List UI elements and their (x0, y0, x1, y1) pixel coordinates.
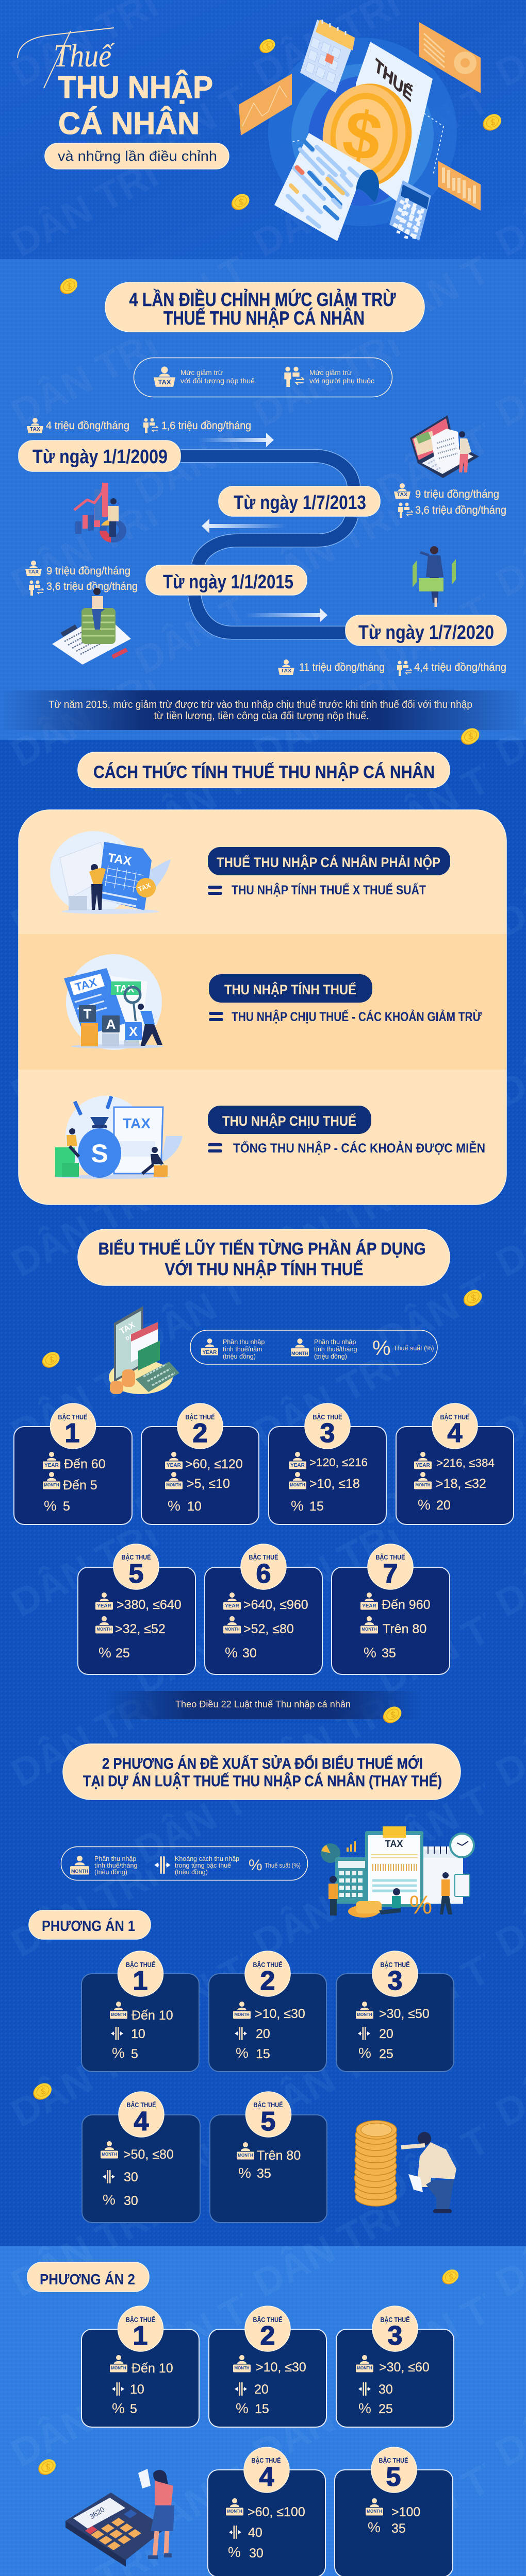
legend: deduction icons: TAX (158, 378, 171, 386)
milestone: 1/1/2009: TAX (30, 426, 40, 432)
heading: two proposals: 2 PHƯƠNG ÁN ĐỀ XUẤT SỬA ĐỔI BIỂU THUẾ MỚI (102, 1755, 423, 1772)
note band (0, 690, 526, 730)
subtitle pill: và những lần điều chỉnh (58, 148, 217, 164)
illustration: woman with calendar and tax form (50, 831, 171, 914)
plan 2 bracket 3: >30, ≤60 (379, 2360, 430, 2375)
tax bracket 3: YEAR (290, 1463, 305, 1468)
arrow: to the left (202, 519, 287, 533)
plan 2 label (27, 2262, 149, 2292)
legend: tax table: Phần thu nhập (314, 1338, 356, 1346)
illustration: money bag and tax form: S (91, 1139, 108, 1168)
plan 1 bracket 3: >30, ≤50 (379, 2007, 430, 2021)
formula 3: TỔNG THU NHẬP - CÁC KHOẢN ĐƯỢC MIỄN (233, 1140, 485, 1156)
plan 2 bracket 4: MONTH (227, 2509, 242, 2514)
plan 2 bracket 1: 5 (130, 2402, 137, 2416)
plan 2 bracket 5: 5 (386, 2462, 401, 2492)
plan 1 bracket 4: MONTH (102, 2152, 117, 2157)
plan 1 bracket 2: % (236, 2045, 249, 2061)
legend: tax table: (triệu đồng) (314, 1353, 347, 1360)
source band: law article: Theo Điều 22 Luật thuế Thu nhập cá nhân (175, 1699, 351, 1709)
plan 1 bracket 1: Đến 10 (132, 2008, 173, 2023)
tax bracket 6: BẬC THUẾ (249, 1553, 278, 1561)
plan 2 bracket 2: 20 (254, 2382, 269, 2397)
legend: proposals: tính thuế/tháng (94, 1862, 137, 1869)
legend: tax table: YEAR (203, 1350, 217, 1355)
legend: proposals: MONTH (71, 1869, 88, 1874)
heading: progressive tax table: BIỂU THUẾ LŨY TIẾN TỪNG PHẦN ÁP DỤNG (98, 1239, 426, 1258)
milestone: 1/1/2015 (25, 561, 307, 596)
plan 1 bracket 1 (81, 1951, 199, 2072)
plan 1 bracket 2: MONTH (234, 2012, 250, 2017)
plan 2 bracket 2: BẬC THUẾ (253, 2316, 283, 2324)
illustration: person on money stack (52, 588, 131, 665)
background: calculation and tax tables (0, 740, 526, 2246)
legend: deduction icons: với người phụ thuộc (309, 377, 374, 385)
milestone: 1/1/2009: Từ ngày 1/1/2009 (32, 446, 168, 468)
tax bracket 7: % (364, 1645, 376, 1660)
legend: proposals: Thuế suất (%) (265, 1862, 301, 1869)
tax bracket 5: >380, ≤640 (117, 1598, 182, 1612)
tax bracket 2: 2 (193, 1418, 207, 1448)
heading: 4 adjustments (105, 282, 424, 332)
tax bracket 5: 5 (129, 1559, 143, 1589)
heading: 4 adjustments: 4 LẦN ĐIỀU CHỈNH MỨC GIẢM TRỪ (129, 289, 396, 310)
milestone: 1/7/2020: 4,4 triệu đồng/tháng (414, 662, 506, 673)
tax document (356, 42, 433, 206)
tax bracket 6: % (225, 1645, 238, 1660)
plan 1 bracket 5: 5 (261, 2107, 275, 2137)
plan 1 bracket 2: >10, ≤30 (255, 2007, 305, 2021)
legend: deduction icons: Mức giảm trừ (180, 368, 223, 377)
plan 1 label (29, 1910, 151, 1939)
plan 2 bracket 3 (336, 2306, 454, 2427)
tax bracket 7: Đến 960 (382, 1598, 431, 1612)
plan 1 bracket 5: % (238, 2165, 251, 2181)
milestone: 1/7/2013: TAX (397, 492, 407, 498)
plan 1 bracket 3 (336, 1951, 454, 2072)
tax bracket 4: 4 (448, 1418, 463, 1448)
milestone: 1/7/2013: 9 triệu đồng/tháng (415, 488, 499, 500)
heading: progressive tax table: VỚI THU NHẬP TÍNH THUẾ (165, 1260, 363, 1279)
heading: progressive tax table (78, 1229, 450, 1285)
tax bracket 7: MONTH (361, 1627, 377, 1632)
plan 2 bracket 4: 4 (259, 2462, 274, 2492)
subtitle pill (45, 143, 229, 169)
legend: deduction icons: với đối tượng nộp thuế (180, 377, 255, 385)
plan 1 label: PHƯƠNG ÁN 1 (42, 1917, 135, 1935)
main title line 1: THU NHẬP (58, 70, 213, 105)
plan 2 bracket 4 (208, 2447, 325, 2576)
plan 2 bracket 5 (335, 2447, 453, 2576)
tax bracket 6: >640, ≤960 (243, 1598, 308, 1612)
plan 1 bracket 1: 5 (131, 2047, 138, 2061)
plan 2 bracket 1 (81, 2306, 199, 2427)
tax bracket 1: Đến 60 (64, 1457, 106, 1471)
illustration: woman with calendar and tax form: TAX (107, 851, 133, 869)
illustration: woman at giant calculator (65, 2469, 174, 2567)
plan 2 bracket 4: 30 (249, 2546, 264, 2561)
plan 1 bracket 5: Trên 80 (257, 2148, 301, 2163)
tax bracket 3: 3 (320, 1418, 335, 1448)
tax bracket 1: YEAR (44, 1463, 59, 1468)
plan 1 bracket 4: >50, ≤80 (123, 2147, 174, 2162)
tax bracket 7 (332, 1544, 450, 1674)
plan 1 bracket 1: 1 (133, 1966, 147, 1996)
plan 2 bracket 3: % (358, 2400, 371, 2416)
legend: deduction icons: Mức giảm trừ (309, 368, 352, 377)
tax bracket 6 (205, 1544, 322, 1674)
legend: proposals: Khoảng cách thu nhập (175, 1855, 239, 1862)
formula 2 (209, 974, 482, 1024)
illustration: tax letters and magnifier: A (106, 1016, 116, 1032)
plan 1 bracket 4: % (103, 2192, 116, 2208)
legend: proposals (61, 1846, 307, 1880)
heading: two proposals (63, 1744, 461, 1800)
illustration: coin stack and man (354, 2121, 456, 2213)
plan 2 bracket 5: >100 (391, 2505, 420, 2519)
tax bracket 4: YEAR (416, 1463, 431, 1468)
tax bracket 2: YEAR (167, 1463, 182, 1468)
illustration: bar chart and analyst (74, 483, 126, 543)
tax bracket 2: MONTH (166, 1483, 182, 1487)
illustration: tax letters and magnifier (64, 954, 164, 1050)
tax bracket 3: >10, ≤18 (309, 1477, 360, 1491)
illustration: money bag and tax form: TAX (123, 1115, 151, 1131)
tax bracket 6: MONTH (224, 1627, 240, 1632)
tax bracket 1: MONTH (44, 1483, 59, 1487)
tax bracket 4 (396, 1403, 514, 1524)
source band: law article (103, 1691, 423, 1719)
hero: title block (18, 28, 229, 169)
legend: proposals: (triệu đồng) (94, 1869, 127, 1876)
plan 1 bracket 4 (82, 2092, 200, 2223)
legend: proposals: Phần thu nhập (94, 1855, 136, 1862)
plan 1 bracket 2 (209, 1951, 326, 2072)
tax bracket 5 (78, 1544, 195, 1674)
legend: tax table: MONTH (291, 1351, 308, 1356)
tax bracket 2: % (168, 1498, 180, 1514)
plan 1 bracket 3: 20 (379, 2027, 393, 2041)
legend: tax table: % (372, 1337, 391, 1360)
illustration: tax day phone: DAY (125, 1332, 137, 1342)
tax bracket 3: BẬC THUẾ (313, 1413, 342, 1421)
plan 1 bracket 5: BẬC THUẾ (254, 2101, 283, 2109)
tax bracket 4: MONTH (415, 1483, 431, 1487)
background: hero (0, 0, 526, 259)
plan 1 bracket 2: 20 (256, 2027, 270, 2041)
formula 1 (208, 847, 450, 897)
plan 1 bracket 3: % (358, 2045, 371, 2061)
tax bracket 6: 30 (242, 1646, 257, 1660)
plan 2 bracket 2: MONTH (234, 2366, 250, 2370)
tax bracket 4: >216, ≤384 (436, 1456, 495, 1469)
plan 1 bracket 2: 15 (256, 2047, 270, 2061)
tax bracket 5: MONTH (96, 1627, 112, 1632)
tax bracket 4: BẬC THUẾ (440, 1413, 469, 1421)
tax bracket 1: 1 (65, 1418, 79, 1448)
milestone: 1/1/2015: 9 triệu đồng/tháng (46, 565, 130, 577)
plan 1 bracket 3: MONTH (357, 2012, 372, 2017)
orange chart cards (239, 22, 481, 211)
plan 2 bracket 2: >10, ≤30 (256, 2360, 306, 2375)
milestone: 1/7/2013: 3,6 triệu đồng/tháng (415, 504, 506, 516)
plan 1 bracket 3: 3 (388, 1966, 402, 1996)
calendar (300, 20, 355, 93)
milestone: 1/1/2015: TAX (28, 569, 39, 575)
tax bracket 1: 5 (63, 1499, 70, 1514)
heading: two proposals: TẠI DỰ ÁN LUẬT THUẾ THU NHẬP CÁ NHÂN (THAY THẾ) (83, 1772, 442, 1790)
legend: deduction icons (134, 358, 392, 397)
arrow: to the right (245, 608, 327, 622)
note band: Từ năm 2015, mức giảm trừ được trừ vào thu nhập chịu thuế trước khi tính thuế đối với thu nhập (48, 699, 472, 710)
hero coins (228, 37, 504, 213)
plan 2 bracket 5: MONTH (367, 2509, 382, 2514)
main title line 2: CÁ NHÂN (58, 106, 200, 141)
legend: tax table: Thuế suất (%) (393, 1345, 434, 1352)
background: plan 2 (0, 2246, 526, 2576)
tax bracket 7: Trên 80 (383, 1622, 426, 1636)
script word: Thuế (54, 39, 115, 74)
plan 1 bracket 2: BẬC THUẾ (253, 1961, 283, 1969)
formula 2: THU NHẬP CHỊU THUẾ - CÁC KHOẢN GIẢM TRỪ (232, 1009, 482, 1024)
plan 1 bracket 1: MONTH (111, 2012, 126, 2017)
calculator (389, 180, 431, 241)
plan 2 bracket 5: BẬC THUẾ (379, 2456, 408, 2464)
illustration: laptop with receipt (410, 415, 479, 478)
plan 2 bracket 2: 15 (255, 2402, 269, 2416)
plan 2 bracket 1: 10 (130, 2382, 144, 2397)
milestone: 1/7/2013: Từ ngày 1/7/2013 (234, 492, 366, 514)
plan 1 bracket 5: MONTH (238, 2153, 253, 2158)
illustration: clipboard, calculator and calendar (321, 1826, 474, 1919)
illustration: tax letters and magnifier: TAX (114, 984, 135, 995)
tax bracket 2: BẬC THUẾ (186, 1413, 215, 1421)
tax bracket 5: >32, ≤52 (115, 1622, 166, 1636)
plan 1 bracket 5 (210, 2092, 327, 2223)
legend: tax table: Phần thu nhập (223, 1338, 265, 1346)
legend: tax table (190, 1330, 437, 1364)
illustration: clipboard, calculator and calendar: % (409, 1890, 432, 1919)
plan 1 bracket 3: 25 (379, 2047, 393, 2061)
tax bracket 2: >60, ≤120 (185, 1457, 243, 1471)
milestone: 1/7/2020: Từ ngày 1/7/2020 (358, 622, 494, 643)
illustration: clipboard, calculator and calendar: TAX (385, 1839, 403, 1849)
tax bracket 5: YEAR (97, 1603, 112, 1609)
arrow: to the right (198, 433, 274, 447)
heading: 4 adjustments: THUẾ THU NHẬP CÁ NHÂN (163, 307, 365, 329)
tax bracket 6: 6 (256, 1559, 271, 1589)
decorative coins (40, 1286, 485, 1370)
tax bracket 7: 7 (383, 1559, 398, 1589)
plan 2 bracket 3: 3 (388, 2321, 402, 2351)
heading: how to calculate: CÁCH THỨC TÍNH THUẾ THU NHẬP CÁ NHÂN (93, 762, 435, 782)
legend: tax table: tính thuế/năm (223, 1346, 262, 1353)
milestone: 1/7/2013 (219, 483, 506, 518)
plan 2 bracket 1: MONTH (111, 2366, 126, 2370)
tax document: THUẾ (373, 55, 414, 106)
panel: calculation formulas (19, 810, 506, 1205)
tax bracket 6: >52, ≤80 (243, 1622, 294, 1636)
plan 2 bracket 1: 1 (133, 2321, 147, 2351)
milestone: 1/7/2020: 11 triệu đồng/tháng (299, 662, 385, 673)
illustration: tax letters and magnifier: X (129, 1024, 138, 1039)
illustration: woman with money (413, 546, 456, 607)
plan 1 bracket 5: 35 (257, 2166, 271, 2181)
tax bracket 4: >18, ≤32 (436, 1477, 486, 1491)
background: deduction section (0, 259, 526, 740)
tax bracket 4: 20 (436, 1498, 451, 1513)
hero illustration: coin, tax documents, calendar, calculator (239, 20, 481, 241)
milestone: 1/1/2015: Từ ngày 1/1/2015 (163, 571, 293, 593)
note band: từ tiền lương, tiền công của đối tượng nộp thuế. (154, 710, 369, 722)
big coin: $ (338, 95, 387, 176)
illustration: tax letters and magnifier: TAX (74, 976, 98, 994)
plan 1 bracket 4: 30 (124, 2194, 138, 2208)
milestone: 1/7/2020 (278, 615, 506, 676)
plan 2 bracket 5: 35 (391, 2521, 406, 2536)
formula 2: THU NHẬP TÍNH THUẾ (224, 981, 356, 997)
heading: how to calculate (78, 752, 450, 788)
decorative coin (458, 725, 482, 748)
plan 1 bracket 4: 30 (124, 2170, 138, 2184)
plan 2 bracket 4: 40 (248, 2526, 262, 2540)
tax bracket 3: >120, ≤216 (309, 1456, 368, 1469)
illustration: money bag and tax form (55, 1096, 183, 1179)
illustration: woman at giant calculator: 3620 (88, 2505, 106, 2520)
tax bracket 4: % (418, 1497, 431, 1513)
milestone: 1/7/2020: TAX (281, 668, 291, 674)
legend: tax table: (triệu đồng) (223, 1353, 256, 1360)
plan 2 bracket 2 (209, 2306, 326, 2427)
plan 2 bracket 3: BẬC THUẾ (381, 2316, 409, 2324)
illustration: tax day phone (109, 1306, 179, 1394)
tax bracket 3: MONTH (290, 1483, 305, 1487)
decorative coin (36, 2456, 58, 2478)
legend: proposals: (triệu đồng) (175, 1869, 208, 1876)
plan 2 label: PHƯƠNG ÁN 2 (40, 2270, 135, 2288)
tax bracket 7: BẬC THUẾ (375, 1553, 405, 1561)
decorative coin (439, 2267, 461, 2287)
tax bracket 1: % (44, 1498, 57, 1514)
timeline connector (180, 456, 354, 633)
tax bracket 5: 25 (116, 1646, 130, 1660)
decorative coin (380, 1703, 404, 1726)
tax bracket 3 (269, 1403, 386, 1524)
tax bracket 7: YEAR (362, 1603, 377, 1609)
illustration: woman with calendar and tax form: TAX (137, 881, 152, 893)
tax bracket 5: % (98, 1645, 111, 1660)
plan 2 bracket 5: % (368, 2519, 381, 2535)
tax bracket 2 (141, 1403, 259, 1524)
plan 2 bracket 4: % (228, 2544, 241, 2560)
receipt (274, 133, 379, 241)
tax bracket 6: YEAR (225, 1603, 240, 1609)
formula 1: THU NHẬP TÍNH THUẾ X THUẾ SUẤT (232, 882, 426, 897)
legend: proposals: trong từng bậc thuế (175, 1862, 231, 1869)
tax bracket 1: Đến 5 (63, 1478, 97, 1493)
milestone: 1/1/2009: 4 triệu đồng/tháng (46, 420, 129, 432)
plan 1 bracket 1: 10 (131, 2027, 145, 2041)
tax bracket 2: >5, ≤10 (187, 1477, 230, 1491)
tax bracket 1: BẬC THUẾ (58, 1413, 88, 1421)
plan 2 bracket 1: Đến 10 (132, 2361, 173, 2376)
decorative coin (57, 276, 80, 297)
illustration: tax letters and magnifier: T (84, 1006, 92, 1022)
legend: tax table: tính thuế/tháng (314, 1346, 357, 1353)
plan 2 bracket 4: BẬC THUẾ (252, 2456, 281, 2464)
tax bracket 7: 35 (382, 1646, 396, 1660)
formula 1: THUẾ THU NHẬP CÁ NHÂN PHẢI NỘP (217, 854, 440, 870)
tax bracket 1 (14, 1403, 132, 1524)
tax bracket 3: % (291, 1498, 304, 1514)
tax bracket 3: 15 (309, 1499, 324, 1514)
plan 2 bracket 4: >60, ≤100 (248, 2505, 305, 2519)
formula 3: THU NHẬP CHỊU THUẾ (222, 1113, 356, 1129)
milestone: 1/1/2009 (19, 418, 251, 471)
milestone: 1/1/2009: 1,6 triệu đồng/tháng (161, 420, 251, 432)
plan 2 bracket 3: 30 (379, 2382, 393, 2397)
decorative coin (30, 2080, 54, 2103)
plan 2 bracket 2: 2 (260, 2321, 275, 2351)
formula 3 (208, 1106, 485, 1156)
tax bracket 2: 10 (187, 1499, 202, 1514)
illustration: tax day phone: TAX (119, 1320, 137, 1336)
plan 2 bracket 3: MONTH (357, 2366, 372, 2370)
plan 2 bracket 3: 25 (379, 2402, 393, 2416)
plan 2 bracket 2: % (236, 2400, 249, 2416)
plan 1 bracket 3: BẬC THUẾ (381, 1961, 409, 1969)
big coin (317, 79, 418, 191)
plan 1 bracket 4: BẬC THUẾ (127, 2101, 156, 2109)
plan 1 bracket 1: % (112, 2045, 125, 2061)
plan 1 bracket 1: BẬC THUẾ (126, 1961, 155, 1969)
milestone: 1/1/2015: 3,6 triệu đồng/tháng (46, 581, 138, 592)
legend: proposals: % (249, 1857, 262, 1874)
tax bracket 5: BẬC THUẾ (122, 1553, 151, 1561)
plan 2 bracket 1: BẬC THUẾ (126, 2316, 155, 2324)
plan 1 bracket 2: 2 (260, 1966, 275, 1996)
plan 2 bracket 1: % (112, 2400, 125, 2416)
plan 1 bracket 4: 4 (134, 2107, 149, 2137)
